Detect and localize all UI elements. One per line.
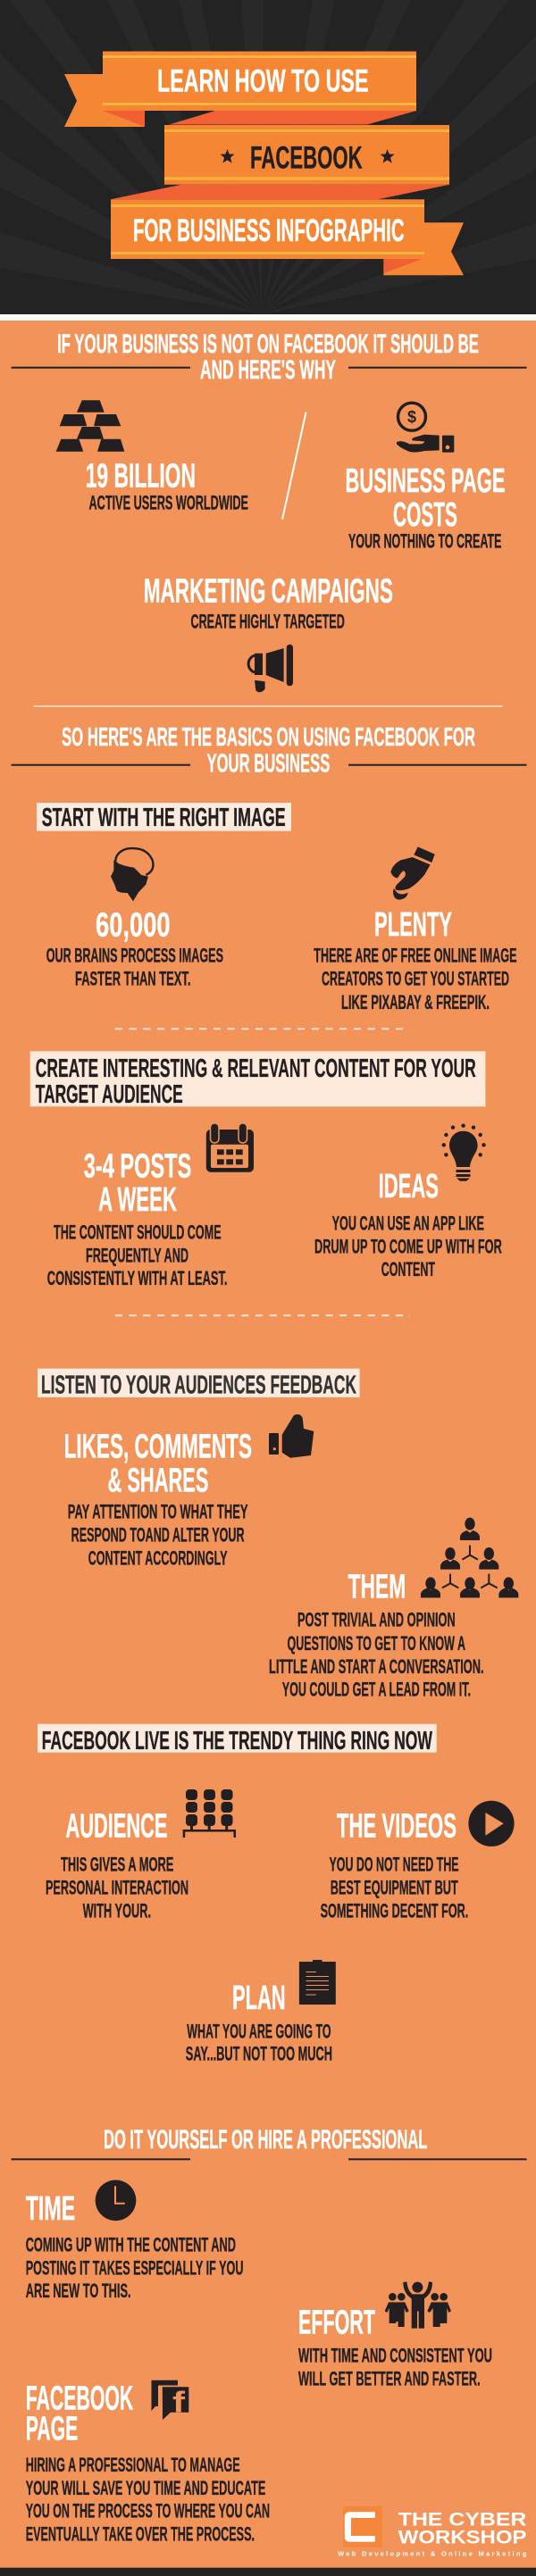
stat: 3-4 posts a week <box>47 1147 227 1289</box>
stat: plan: PLAN <box>232 1980 286 2017</box>
stat: 3-4 posts a week: THE CONTENT SHOULD COME <box>54 1221 222 1243</box>
stat: 3-4 posts a week: FREQUENTLY AND <box>86 1244 188 1266</box>
heading box: start with the right image <box>37 803 291 832</box>
icon: thumbs up <box>269 1414 314 1458</box>
icon: light bulb <box>442 1123 486 1181</box>
stat: facebook page: YOU ON THE PROCESS TO WHERE YOU CAN <box>26 2500 270 2522</box>
stat: audience: PERSONAL INTERACTION <box>46 1877 188 1899</box>
stat: the videos <box>321 1808 468 1922</box>
icon: hand with pen <box>390 846 435 900</box>
logo: the cyber workshop: WORKSHOP <box>398 2527 526 2547</box>
icon: people network <box>421 1518 518 1597</box>
stat: time <box>26 2190 244 2302</box>
stat: plan <box>186 1980 332 2065</box>
stat: facebook page: YOUR WILL SAVE YOU TIME AND EDUCATE <box>26 2477 265 2499</box>
heading box: create interesting content: TARGET AUDIENCE <box>36 1080 183 1109</box>
stat: marketing campaigns: CREATE HIGHLY TARGETED <box>191 610 345 632</box>
icon: star right <box>381 149 395 163</box>
icon: audience seats <box>183 1789 236 1838</box>
logo: the cyber workshop <box>338 2506 527 2557</box>
stat: audience: WITH YOUR. <box>83 1899 151 1922</box>
stat: business page costs: COSTS <box>393 496 457 534</box>
stat: plenty <box>314 906 517 1013</box>
panel: basics heading: YOUR BUSINESS <box>207 749 330 778</box>
heading: why <box>12 329 527 385</box>
icon: team cheering <box>385 2281 451 2329</box>
heading box: start with the right image: START WITH THE RIGHT IMAGE <box>42 804 286 832</box>
stat: facebook page: HIRING A PROFESSIONAL TO MANAGE <box>26 2454 240 2476</box>
stat: time: ARE NEW TO THIS. <box>26 2280 131 2302</box>
heading box: create interesting content <box>30 1051 485 1109</box>
stat: them: THEM <box>348 1568 406 1605</box>
stat: facebook page: EVENTUALLY TAKE OVER THE PROCESS. <box>26 2523 255 2546</box>
stat: 3-4 posts a week: CONSISTENTLY WITH AT LEAST. <box>47 1267 227 1289</box>
icon: star left <box>220 149 234 163</box>
stat: audience <box>46 1808 188 1922</box>
stat: effort <box>298 2304 492 2389</box>
title line 2: FACEBOOK <box>250 141 363 176</box>
icon: facebook chat: f <box>172 2386 186 2419</box>
logo: the cyber workshop: THE CYBER <box>398 2509 526 2530</box>
stat: 60,000: 60,000 <box>96 906 171 944</box>
stat: facebook page <box>26 2380 270 2546</box>
stat: audience: AUDIENCE <box>66 1808 168 1846</box>
stat: 3-4 posts a week: 3-4 POSTS <box>84 1147 191 1185</box>
stat: 60,000: OUR BRAINS PROCESS IMAGES <box>46 945 223 967</box>
stat: facebook page: PAGE <box>26 2411 78 2448</box>
stat: marketing campaigns <box>144 572 393 632</box>
panel: right image <box>37 803 517 1029</box>
title ribbon <box>64 52 464 275</box>
panel: facebook live <box>38 1724 515 2065</box>
icon: money in hand <box>397 403 454 453</box>
stat: likes comments shares: & SHARES <box>107 1463 208 1500</box>
icon: head with brain <box>111 848 153 901</box>
stat: facebook page: FACEBOOK <box>26 2380 134 2417</box>
panel: why section <box>12 329 527 707</box>
panel: feedback <box>38 1369 518 1701</box>
stat: likes comments shares: RESPOND TOAND ALTER YOUR <box>71 1524 245 1546</box>
stat: 3-4 posts a week: A WEEK <box>98 1181 177 1219</box>
icon: megaphone <box>248 645 293 692</box>
stat: 60,000: FASTER THAN TEXT. <box>75 967 191 989</box>
divider slash <box>282 413 306 520</box>
stat: likes comments shares: LIKES, COMMENTS <box>64 1428 252 1465</box>
icon: gold bars <box>56 400 124 452</box>
footer bar <box>0 2568 536 2576</box>
heading box: listen to feedback <box>38 1369 360 1400</box>
icon: play button <box>468 1801 515 1847</box>
icon: clock <box>96 2180 136 2221</box>
logo: the cyber workshop: Web Development & Online Marketing <box>338 2549 527 2557</box>
stat: plan: SAY...BUT NOT TOO MUCH <box>186 2043 332 2065</box>
stat: plan: WHAT YOU ARE GOING TO <box>187 2020 331 2042</box>
stat: ideas: IDEAS <box>379 1168 439 1205</box>
icon: money in hand: $ <box>407 408 416 426</box>
stat: 19 billion: ACTIVE USERS WORLDWIDE <box>89 492 248 514</box>
panel: diy or hire <box>12 2125 527 2557</box>
stat: time: TIME <box>26 2190 75 2228</box>
stat: them <box>269 1568 484 1701</box>
stat: audience: THIS GIVES A MORE <box>61 1854 173 1876</box>
icon: clipboard <box>299 1960 336 2005</box>
stat: 60,000 <box>46 906 223 989</box>
stat: likes comments shares: CONTENT ACCORDINGLY <box>88 1546 228 1569</box>
heading: why: AND HERE'S WHY <box>200 355 336 385</box>
stat: 19 billion: 19 BILLION <box>86 458 196 496</box>
stat: business page costs <box>345 463 506 552</box>
panel: basics heading <box>12 723 527 778</box>
stat: ideas <box>314 1168 502 1280</box>
stat: time: POSTING IT TAKES ESPECIALLY IF YOU <box>26 2256 244 2279</box>
icon: calendar <box>206 1123 254 1172</box>
icon: facebook chat <box>152 2380 188 2420</box>
panel: content <box>30 1051 502 1315</box>
stat: time: COMING UP WITH THE CONTENT AND <box>26 2233 236 2255</box>
stat: effort: EFFORT <box>298 2304 375 2341</box>
stat: 19 billion <box>86 458 248 514</box>
panel: dark header <box>0 0 536 321</box>
stat: likes comments shares <box>64 1428 252 1569</box>
stat: likes comments shares: PAY ATTENTION TO WHAT THEY <box>68 1501 248 1523</box>
stat: ideas: CONTENT <box>381 1258 435 1280</box>
stat: plenty: PLENTY <box>374 906 452 944</box>
title line 1: LEARN HOW TO USE <box>157 64 368 99</box>
